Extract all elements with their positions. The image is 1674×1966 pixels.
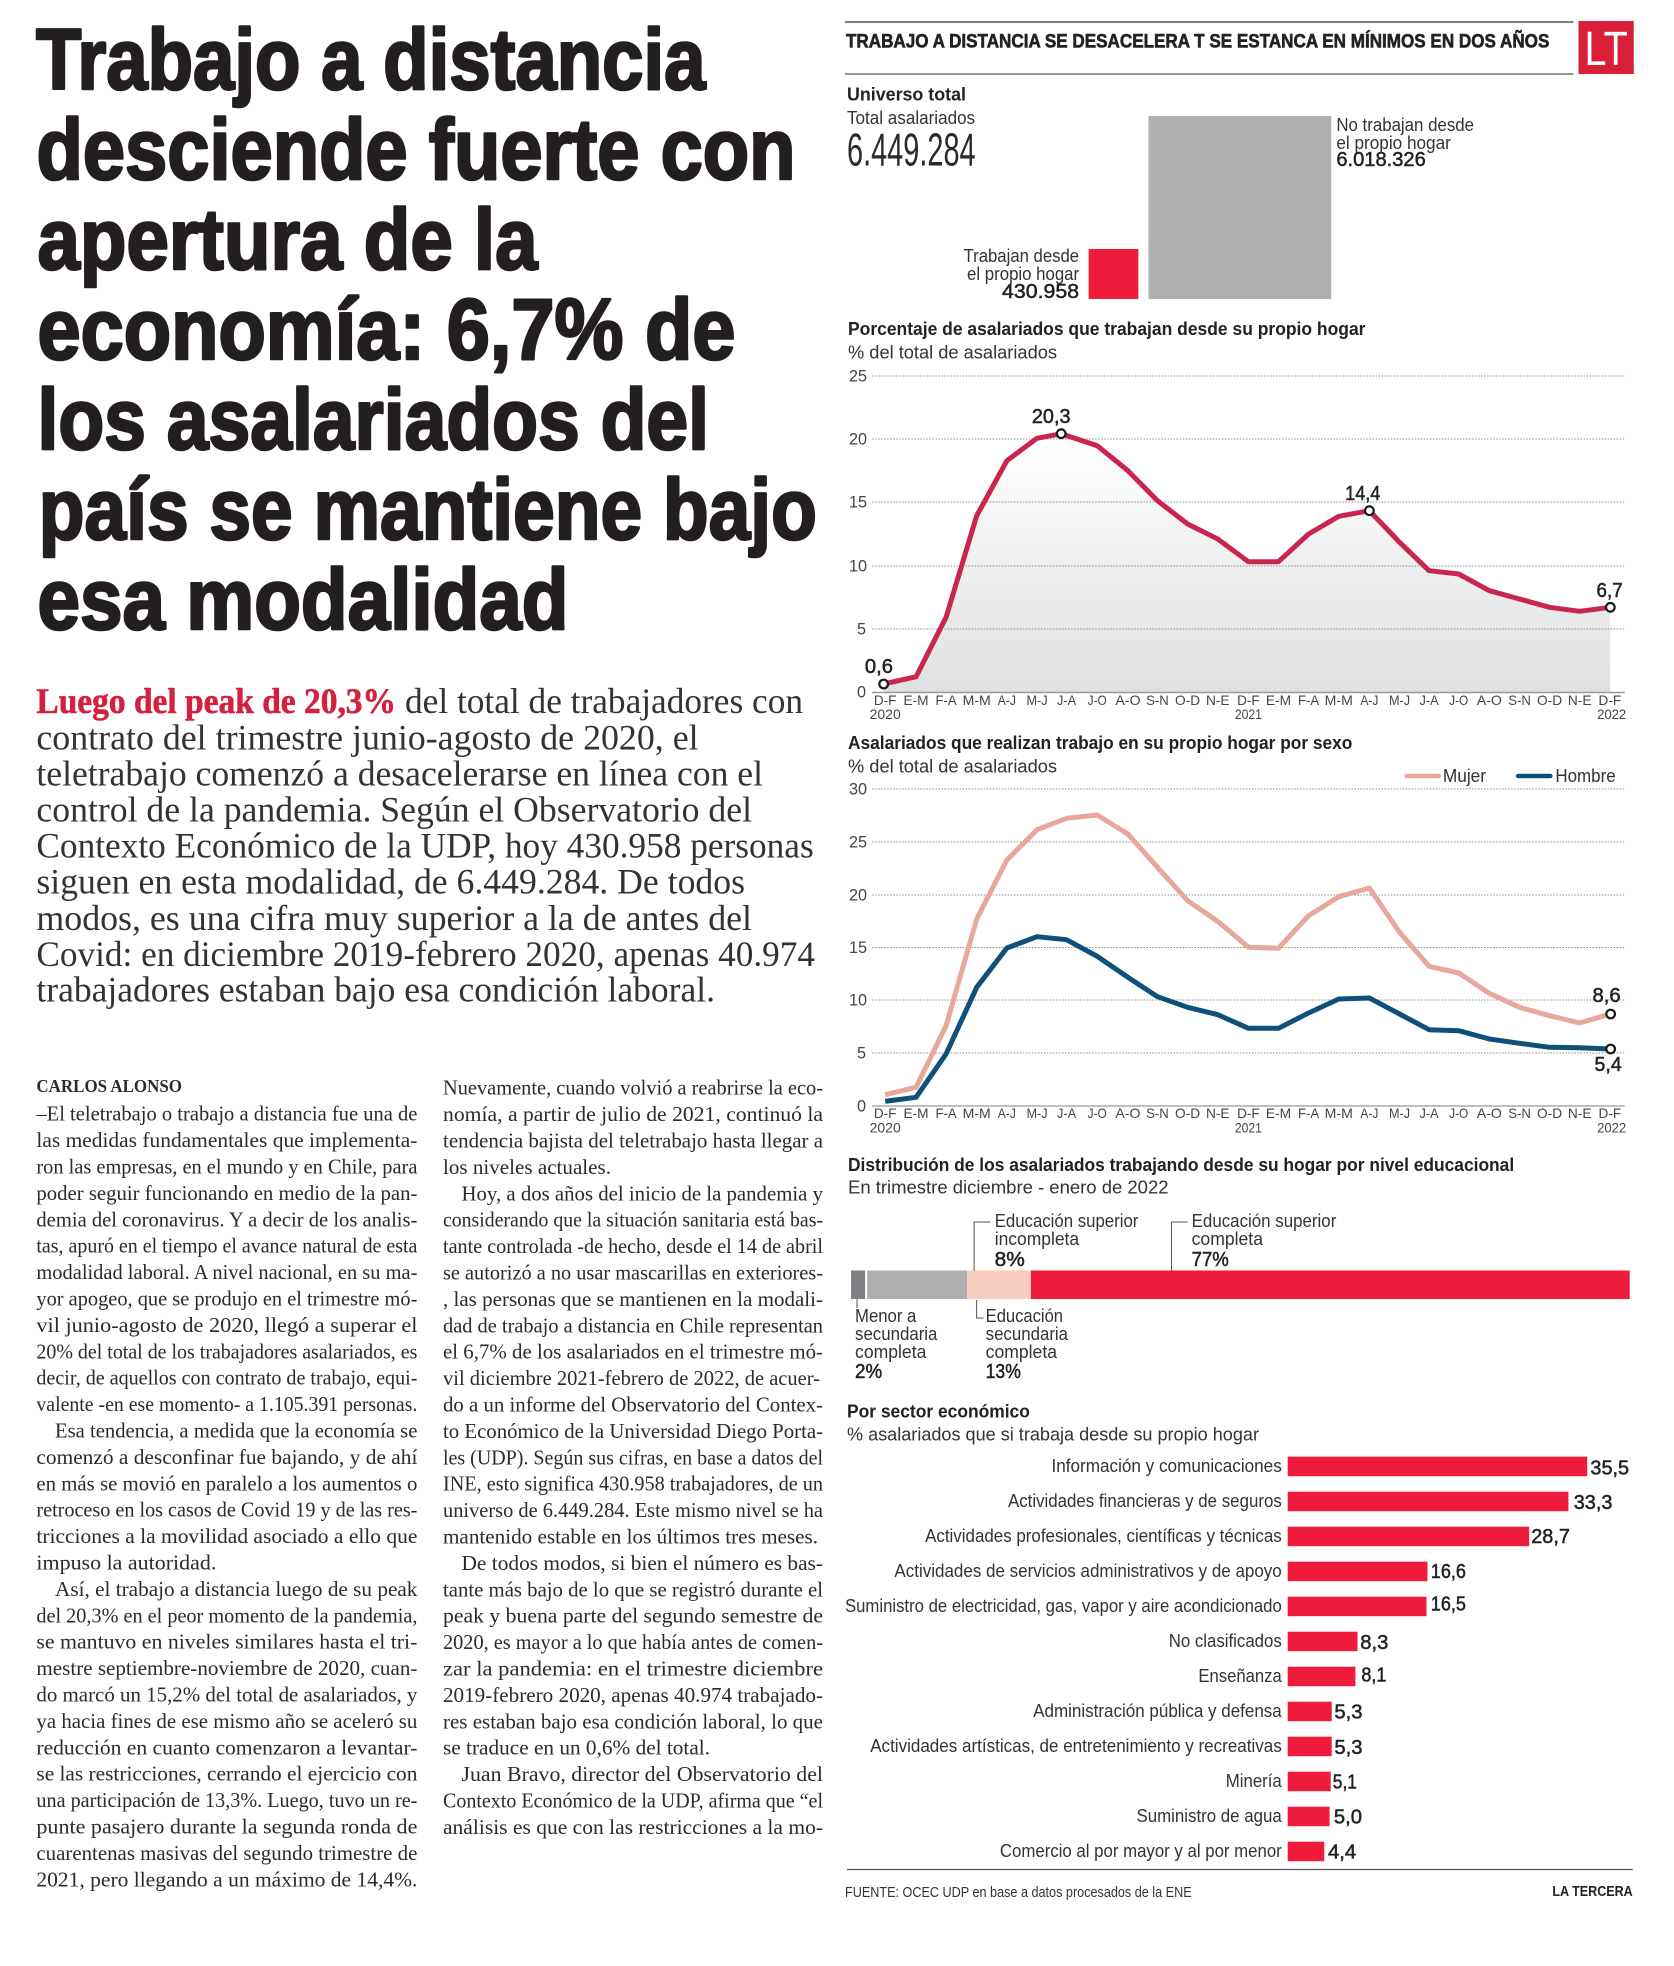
x axis labels: A-O: [1477, 1106, 1502, 1121]
article column 2: nomía, a partir de julio de 2021, continuó la: [443, 1102, 824, 1126]
lead paragraph: Luego del peak de 20,3%: [36, 681, 396, 721]
x axis labels: A-J: [998, 1106, 1016, 1121]
x axis labels: S-N: [1508, 1106, 1531, 1121]
category labels: Administración pública y defensa: [1033, 1700, 1282, 1721]
label: secundaria completa: completa: [986, 1341, 1058, 1362]
x axis labels: 2021: [1235, 1121, 1262, 1135]
panel: universo total: [847, 84, 1474, 303]
value labels: 35,5: [1590, 1457, 1629, 1479]
value labels: [1328, 1457, 1629, 1864]
label: no trabajan desde el hogar: No trabajan desde: [1336, 114, 1474, 135]
panel: por sexo line chart: [848, 732, 1626, 1135]
x axis labels: 2022: [1597, 1121, 1626, 1135]
x axis labels: M-J: [1026, 1106, 1048, 1121]
article column 1: tricciones a la movilidad asociado a ello que: [36, 1524, 417, 1548]
article column 1: ron las empresas, en el mundo y en Chile, para: [36, 1154, 418, 1178]
heading: sector: Por sector económico: [847, 1401, 1030, 1421]
y axis labels: [849, 780, 867, 1115]
label: superior incompleta: Educación superior: [995, 1210, 1138, 1231]
label: no trabajan desde el hogar: [1336, 114, 1474, 171]
article column 2: INE, esto significa 430.958 trabajadores, de un: [443, 1472, 823, 1496]
lead paragraph: teletrabajo comenzó a desacelerarse en línea con el: [36, 753, 763, 793]
x axis labels: F-A: [1298, 1106, 1319, 1121]
x axis labels: M-J: [1389, 693, 1410, 708]
x axis labels: 2020: [870, 707, 901, 722]
x axis labels: M-M: [1325, 1106, 1353, 1121]
lead paragraph: Covid: en diciembre 2019-febrero 2020, apenas 40.974: [36, 934, 815, 974]
label: trabajan desde el hogar: 430.958: [1002, 281, 1079, 303]
icon: La Tercera logo: LT: [1585, 22, 1628, 76]
x axis labels: D-F: [1599, 1106, 1621, 1121]
x axis labels: A-J: [1360, 693, 1378, 708]
data labels: 6,7: [1597, 580, 1623, 602]
data labels: 8,6: [1593, 985, 1621, 1007]
x axis labels: [870, 1106, 1626, 1135]
x axis labels: E-M: [903, 1106, 929, 1121]
article column 1: reducción en cuanto comenzaron a levantar-: [36, 1735, 417, 1759]
x axis labels: S-N: [1146, 1106, 1169, 1121]
value labels: 16,6: [1431, 1561, 1466, 1583]
article column 1: [35, 1102, 418, 1891]
heading: porcentaje: Porcentaje de asalariados que trabajan desde su propio hogar: [848, 318, 1365, 339]
article column 1: cuarentenas masivas del segundo trimestre de: [36, 1841, 417, 1865]
article column 1: Esa tendencia, a medida que la economía se: [55, 1418, 417, 1442]
subheading: % asalariados que si trabaja desde su propio hogar: [847, 1424, 1259, 1444]
article column 2: , las personas que se mantienen en la modali-: [443, 1287, 823, 1311]
credit: LA TERCERA: [1552, 1883, 1633, 1900]
label: superior completa: [1192, 1210, 1336, 1271]
lead paragraph: [36, 681, 815, 1010]
bar: trabajan desde el hogar: [1089, 249, 1138, 299]
article column 1: modalidad laboral. A nivel nacional, en su ma-: [36, 1260, 417, 1284]
label: trabajan desde el hogar: [964, 245, 1079, 303]
article column 1: se mantuvo en niveles similares hasta el tri-: [36, 1630, 417, 1654]
category labels: [845, 1455, 1282, 1861]
x axis labels: F-A: [1298, 693, 1319, 708]
line: mujer: [885, 815, 1610, 1095]
x axis labels: N-E: [1568, 693, 1592, 708]
legend: [1407, 765, 1616, 786]
label: secundaria completa: [986, 1305, 1069, 1383]
label: superior incompleta: incompleta: [995, 1228, 1080, 1249]
x axis labels: F-A: [936, 693, 957, 708]
article column 2: res estaban bajo esa condición laboral, lo que: [443, 1709, 823, 1733]
x axis labels: J-O: [1449, 693, 1468, 708]
article column 2: tendencia bajista del teletrabajo hasta llegar a: [443, 1128, 824, 1152]
y axis labels: 20: [849, 430, 867, 448]
heading: universo total: Universo total: [847, 84, 966, 105]
label: no trabajan desde el hogar: el propio hogar: [1336, 132, 1451, 153]
y axis labels: 10: [849, 991, 867, 1009]
article column 1: Así, el trabajo a distancia luego de su peak: [55, 1577, 418, 1601]
markers: [1606, 1010, 1615, 1053]
x axis labels: A-J: [1360, 1106, 1378, 1121]
x axis labels: A-O: [1477, 693, 1502, 708]
value labels: 8,1: [1361, 1665, 1386, 1687]
x axis labels: N-E: [1568, 1106, 1592, 1121]
label: superior completa: completa: [1192, 1228, 1264, 1249]
article column 1: demia del coronavirus. Y a decir de los analis-: [36, 1207, 417, 1231]
x axis labels: J-A: [1420, 693, 1439, 708]
value labels: 5,0: [1334, 1806, 1362, 1828]
article column 2: Nuevamente, cuando volvió a reabrirse la eco-: [443, 1076, 823, 1100]
article column 2: el 6,7% de los asalariados en el trimestre mó-: [443, 1340, 823, 1364]
bars: [1288, 1457, 1587, 1861]
label: menor a secundaria: Menor a: [855, 1305, 917, 1326]
label: trabajan desde el hogar: Trabajan desde: [964, 245, 1079, 266]
byline: CARLOS ALONSO: [36, 1076, 182, 1096]
article column 1: se las restricciones, cerrando el ejercicio con: [36, 1762, 418, 1786]
x axis labels: J-A: [1057, 693, 1076, 708]
value labels: 4,4: [1328, 1842, 1356, 1864]
x axis labels: J-A: [1420, 1106, 1439, 1121]
x axis labels: E-M: [903, 693, 929, 708]
article column 1: ya hacia fines de ese mismo año se aceleró su: [36, 1709, 418, 1733]
article column 1: impuso la autoridad.: [36, 1550, 216, 1574]
y axis labels: 0: [857, 683, 866, 701]
article column 1: decir, de aquellos con contrato de trabajo, equi-: [36, 1366, 417, 1390]
headline: desciende fuerte con: [36, 102, 796, 198]
category labels: Actividades artísticas, de entretenimiento y recreativas: [870, 1735, 1282, 1756]
article column 2: to Económico de la Universidad Diego Porta-: [443, 1419, 823, 1443]
category labels: Suministro de electricidad, gas, vapor y aire acondicionado: [845, 1595, 1282, 1616]
headline: [36, 12, 817, 648]
x axis labels: O-D: [1537, 1106, 1562, 1121]
value labels: 5,3: [1334, 1737, 1363, 1759]
x axis labels: N-E: [1206, 1106, 1230, 1121]
x axis labels: M-J: [1026, 693, 1048, 708]
article column 1: las medidas fundamentales que implementa-: [36, 1128, 417, 1152]
article column 2: tante más bajo de lo que se registró durante el: [443, 1577, 823, 1601]
subheading: En trimestre diciembre - enero de 2022: [848, 1177, 1169, 1197]
x axis labels: M-M: [963, 693, 991, 708]
panel: nivel educacional: [848, 1154, 1630, 1383]
x axis labels: D-F: [874, 693, 896, 708]
line chart: porcentaje: [849, 367, 1626, 722]
article column 2: Contexto Económico de la UDP, afirma que “el: [443, 1788, 823, 1812]
article column 2: Hoy, a dos años del inicio de la pandemia y: [462, 1181, 823, 1205]
article column 2: análisis es que con las restricciones a la mo-: [443, 1815, 823, 1839]
article column 1: comenzó a desconfinar fue bajando, y de ahí: [36, 1445, 418, 1469]
label: trabajan desde el hogar: el propio hogar: [967, 263, 1079, 284]
y axis labels: 15: [849, 938, 867, 957]
x axis labels: J-A: [1057, 1106, 1076, 1121]
total asalariados figure: 6.449.284: [847, 124, 976, 175]
article column 1: –El teletrabajo o trabajo a distancia fue una de: [35, 1102, 417, 1126]
value labels: 5,1: [1333, 1771, 1357, 1793]
x axis labels: M-J: [1389, 1106, 1410, 1121]
article column 1: en más se movió en paralelo a los aumentos o: [36, 1471, 417, 1495]
x axis labels: J-O: [1088, 1106, 1107, 1121]
x axis labels: D-F: [874, 1106, 896, 1121]
y axis labels: 0: [857, 1097, 866, 1115]
heading: por sexo: Asalariados que realizan trabajo en su propio hogar por sexo: [848, 732, 1352, 753]
subheading: % del total de asalariados: [848, 342, 1057, 362]
article column 2: De todos modos, si bien el número es bas-: [462, 1551, 823, 1575]
article column 1: del 20,3% en el peor momento de la pandemia,: [36, 1603, 417, 1627]
article column 2: considerando que la situación sanitaria está bas-: [443, 1208, 823, 1232]
x axis labels: O-D: [1175, 693, 1200, 708]
article column 2: [443, 1076, 824, 1839]
y axis labels: 30: [849, 780, 867, 798]
lead paragraph: Contexto Económico de la UDP, hoy 430.958 personas: [36, 826, 814, 866]
x axis labels: 2021: [1235, 707, 1262, 722]
total asalariados figure: [847, 107, 976, 175]
article column 1: valente -en ese momento- a 1.105.391 personas.: [36, 1392, 417, 1416]
article column 2: universo de 6.449.284. Este mismo nivel se ha: [443, 1498, 824, 1522]
headline: Trabajo a distancia: [36, 12, 707, 108]
line: porcentaje: [884, 434, 1610, 684]
panel: infographic column: [845, 21, 1634, 1901]
label: secundaria completa: Educación: [986, 1305, 1063, 1326]
category labels: Comercio al por mayor y al por menor: [1000, 1840, 1282, 1861]
data labels: 14,4: [1345, 483, 1380, 505]
x axis labels: 2020: [870, 1121, 901, 1135]
x axis labels: A-J: [998, 693, 1016, 708]
article column 2: se autorizó a no usar mascarillas en exteriores-: [443, 1260, 823, 1284]
article column 2: 2019-febrero 2020, apenas 40.974 trabajado-: [443, 1683, 823, 1707]
article column 2: zar la pandemia: en el trimestre diciembre: [443, 1656, 823, 1680]
lead paragraph: contrato del trimestre junio-agosto de 2020, el: [36, 717, 699, 757]
label: secundaria completa: secundaria: [986, 1323, 1069, 1344]
y axis labels: 15: [849, 493, 867, 511]
headline: esa modalidad: [38, 552, 568, 648]
article column 2: Juan Bravo, director del Observatorio del: [462, 1762, 823, 1786]
article column 1: yor apogeo, que se produjo en el trimestre mó-: [36, 1286, 417, 1310]
y axis labels: 5: [857, 620, 866, 638]
article column 2: les (UDP). Según sus cifras, en base a datos del: [443, 1445, 823, 1469]
label: secundaria completa: 13%: [986, 1361, 1021, 1383]
label: menor a secundaria: secundaria: [855, 1323, 938, 1344]
y axis labels: 25: [849, 367, 867, 385]
markers: [879, 429, 1615, 688]
panel: por sector economico: [845, 1401, 1629, 1864]
article column 2: vil diciembre 2021-febrero de 2022, de acuer-: [443, 1366, 820, 1390]
x axis labels: D-F: [1237, 1106, 1260, 1121]
bar: no trabajan desde el hogar: [1148, 116, 1331, 299]
category labels: Actividades financieras y de seguros: [1008, 1490, 1282, 1511]
legend: Mujer: [1443, 765, 1486, 786]
lead paragraph: modos, es una cifra muy superior a la de antes del: [36, 898, 752, 938]
label: superior completa: 77%: [1192, 1249, 1229, 1271]
x axis labels: E-M: [1266, 1106, 1291, 1121]
headline: país se mantiene bajo: [39, 462, 817, 558]
x axis labels: O-D: [1537, 693, 1562, 708]
headline: los asalariados del: [38, 372, 709, 468]
infographic header: TRABAJO A DISTANCIA SE DESACELERA T SE ESTANCA EN MÍNIMOS EN DOS AÑOS: [846, 30, 1549, 53]
article column 1: 20% del total de los trabajadores asalariados, es: [36, 1339, 417, 1363]
article column 1: 2021, pero llegando a un máximo de 14,4%.: [36, 1867, 417, 1891]
article column 1: punte pasajero durante la segunda ronda de: [36, 1814, 417, 1838]
y axis labels: [849, 367, 867, 701]
article column 1: do marcó un 15,2% del total de asalariados, y: [36, 1682, 418, 1706]
headline: apertura de la: [38, 192, 539, 288]
value labels: 33,3: [1574, 1492, 1612, 1514]
y axis labels: 20: [849, 886, 867, 904]
label: superior completa: Educación superior: [1192, 1210, 1336, 1231]
x axis labels: J-O: [1088, 693, 1107, 708]
article column 2: los niveles actuales.: [443, 1155, 611, 1179]
heading: nivel educacional: Distribución de los asalariados trabajando desde su hogar por nivel educacional: [848, 1154, 1514, 1175]
category labels: Minería: [1226, 1770, 1282, 1791]
article column 2: se traduce en un 0,6% del total.: [443, 1736, 710, 1760]
label: menor a secundaria: 2%: [855, 1361, 882, 1383]
x axis labels: A-O: [1115, 1106, 1140, 1121]
label: menor a secundaria: [855, 1305, 938, 1383]
article column 2: peak y buena parte del segundo semestre de: [443, 1604, 823, 1628]
lead paragraph: trabajadores estaban bajo esa condición laboral.: [36, 970, 715, 1010]
headline: economía: 6,7% de: [38, 282, 736, 378]
source: FUENTE: OCEC UDP en base a datos procesados de la ENE: [845, 1884, 1192, 1901]
data labels: [865, 406, 1623, 678]
x axis labels: [870, 693, 1626, 722]
article column 1: retroceso en los casos de Covid 19 y de las res-: [36, 1498, 417, 1522]
y axis labels: 5: [857, 1044, 866, 1062]
data labels: [1593, 985, 1622, 1076]
article column 1: poder seguir funcionando en medio de la pan-: [36, 1181, 417, 1205]
value labels: 8,3: [1360, 1632, 1388, 1654]
stacked bar: [851, 1270, 1630, 1299]
article column 2: 2020, es mayor a lo que había antes de comen-: [443, 1630, 823, 1654]
article column 2: mantenido estable en los últimos tres meses.: [443, 1524, 818, 1548]
y axis labels: 10: [849, 557, 867, 575]
article column 1: tas, apuró en el tiempo el avance natural de esta: [36, 1234, 418, 1258]
value labels: 5,3: [1334, 1701, 1363, 1723]
value labels: 28,7: [1531, 1526, 1570, 1548]
x axis labels: 2022: [1597, 707, 1626, 722]
x axis labels: M-M: [963, 1106, 991, 1121]
value labels: 16,5: [1431, 1594, 1466, 1616]
line: hombre: [885, 937, 1610, 1101]
x axis labels: E-M: [1266, 693, 1291, 708]
area under line: [884, 434, 1610, 692]
footer: [845, 1870, 1633, 1901]
x axis labels: M-M: [1325, 693, 1353, 708]
line chart: por sexo: [849, 780, 1626, 1135]
lead paragraph: del total de trabajadores con: [405, 681, 803, 721]
category labels: Actividades de servicios administrativos y de apoyo: [894, 1560, 1282, 1581]
label: menor a secundaria: completa: [855, 1341, 927, 1362]
article column 2: dad de trabajo a distancia en Chile representan: [443, 1313, 823, 1337]
label: superior incompleta: [995, 1210, 1138, 1271]
x axis labels: S-N: [1508, 693, 1531, 708]
lead paragraph: control de la pandemia. Según el Observatorio del: [36, 790, 752, 830]
label: no trabajan desde el hogar: 6.018.326: [1336, 149, 1426, 171]
data labels: 20,3: [1032, 406, 1071, 428]
x axis labels: S-N: [1146, 693, 1169, 708]
category labels: Suministro de agua: [1136, 1805, 1282, 1826]
data labels: 0,6: [865, 656, 893, 678]
y axis labels: 25: [849, 833, 867, 851]
x axis labels: D-F: [1599, 693, 1621, 708]
category labels: Actividades profesionales, científicas y técnicas: [925, 1525, 1282, 1546]
x axis labels: F-A: [936, 1106, 957, 1121]
article column 1: vil junio-agosto de 2020, llegó a superar el: [36, 1313, 418, 1337]
article column 2: do a un informe del Observatorio del Contex-: [443, 1392, 823, 1416]
x axis labels: J-O: [1449, 1106, 1468, 1121]
x axis labels: D-F: [1237, 693, 1260, 708]
x axis labels: A-O: [1115, 693, 1140, 708]
category labels: No clasificados: [1169, 1630, 1282, 1651]
panel: porcentaje line chart: [848, 318, 1626, 722]
label: superior incompleta: 8%: [995, 1249, 1025, 1271]
data labels: 5,4: [1595, 1054, 1622, 1076]
lead paragraph: siguen en esta modalidad, de 6.449.284. De todos: [36, 862, 745, 902]
x axis labels: N-E: [1206, 693, 1230, 708]
article column 1: una participación de 13,3%. Luego, tuvo un re-: [36, 1788, 417, 1812]
leader lines: [857, 1222, 1188, 1318]
legend: Hombre: [1555, 765, 1616, 786]
category labels: Enseñanza: [1198, 1665, 1282, 1686]
subheading: % del total de asalariados: [848, 756, 1057, 776]
article column 2: tante controlada -de hecho, desde el 14 de abril: [443, 1234, 823, 1258]
x axis labels: O-D: [1175, 1106, 1200, 1121]
article column 1: mestre septiembre-noviembre de 2020, cuan-: [36, 1656, 417, 1680]
total asalariados figure: Total asalariados: [847, 107, 975, 128]
category labels: Información y comunicaciones: [1051, 1455, 1282, 1476]
